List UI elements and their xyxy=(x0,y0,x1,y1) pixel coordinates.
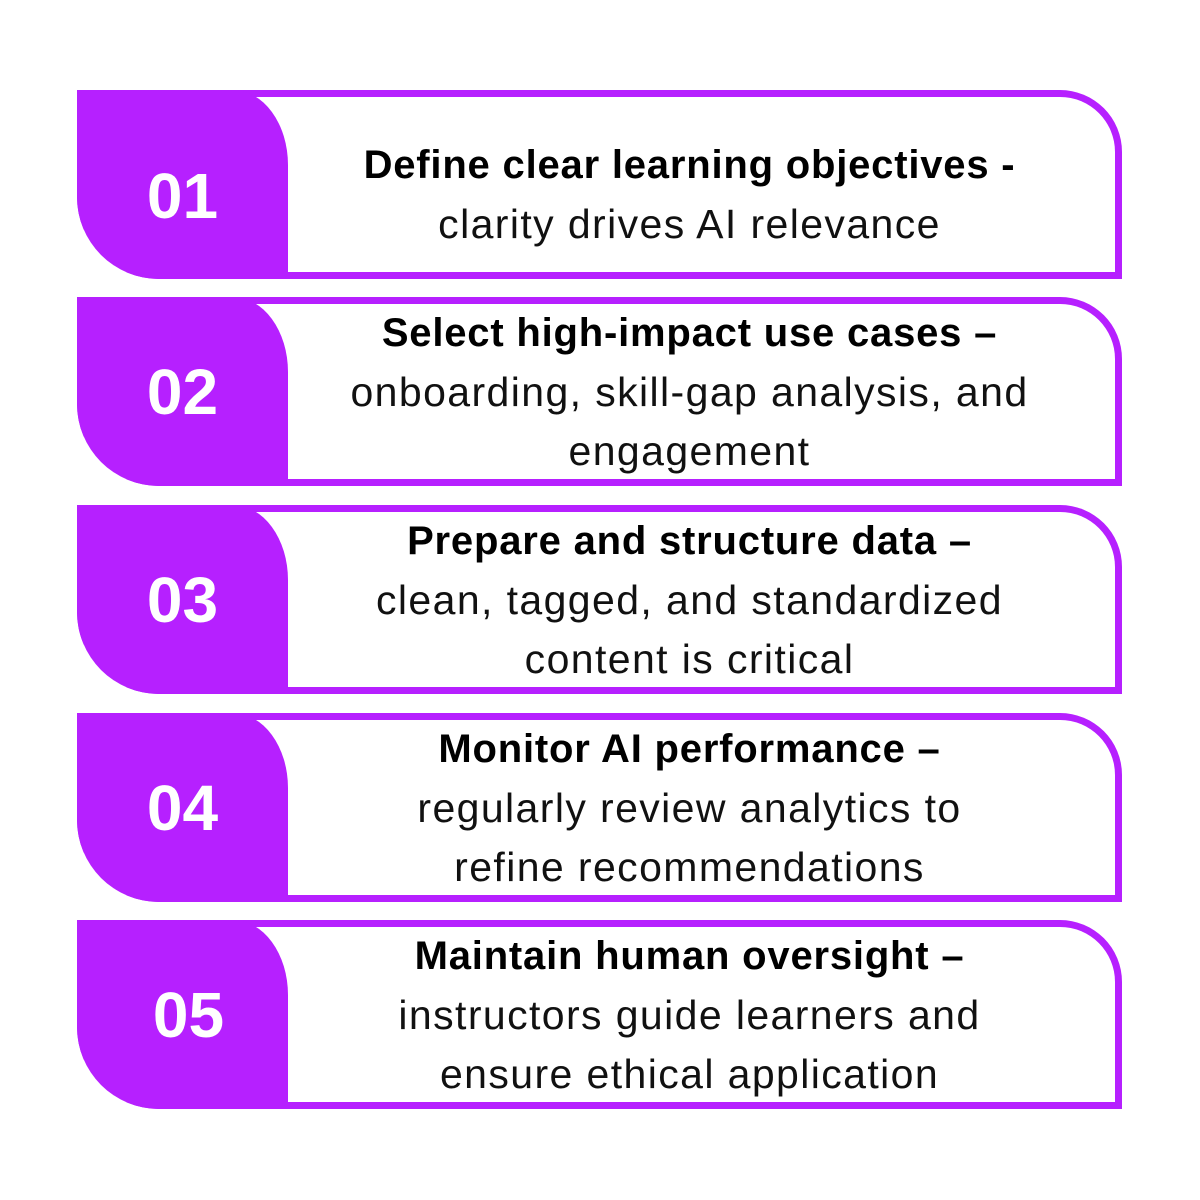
card 04 xyxy=(77,713,1122,902)
text 05 xyxy=(398,934,981,1096)
text 03: content is critical xyxy=(525,636,854,682)
text 02: onboarding, skill-gap analysis, and xyxy=(350,368,1029,414)
number 05: 05 xyxy=(153,978,224,1050)
text 04 xyxy=(417,726,962,890)
text 04: regularly review analytics to xyxy=(417,784,962,830)
text 02: engagement xyxy=(569,428,810,474)
number 04 xyxy=(77,713,288,902)
text 01: Define clear learning objectives - xyxy=(364,143,1015,187)
number 04: 04 xyxy=(147,772,218,844)
number 02 xyxy=(77,297,288,486)
card 03 xyxy=(77,505,1122,694)
text 02: Select high-impact use cases – xyxy=(382,310,997,354)
text 01: clarity drives AI relevance xyxy=(438,201,941,247)
number 03 xyxy=(77,505,288,694)
number 01: 01 xyxy=(147,160,218,232)
text 03: clean, tagged, and standardized xyxy=(376,576,1003,622)
text 05: ensure ethical application xyxy=(440,1050,939,1096)
text 02 xyxy=(350,310,1029,474)
text 04: refine recommendations xyxy=(454,844,925,890)
text 05: Maintain human oversight – xyxy=(415,934,964,978)
text 04: Monitor AI performance – xyxy=(438,726,941,770)
card 05 xyxy=(77,920,1122,1109)
number 03: 03 xyxy=(147,564,218,636)
card 01 xyxy=(77,90,1122,279)
number 02: 02 xyxy=(147,356,218,428)
text 03 xyxy=(376,518,1003,682)
number 01 xyxy=(77,90,288,279)
number 05 xyxy=(77,920,288,1109)
text 01 xyxy=(364,143,1015,247)
card 02 xyxy=(77,297,1122,486)
text 03: Prepare and structure data – xyxy=(407,518,972,562)
text 05: instructors guide learners and xyxy=(398,992,981,1038)
